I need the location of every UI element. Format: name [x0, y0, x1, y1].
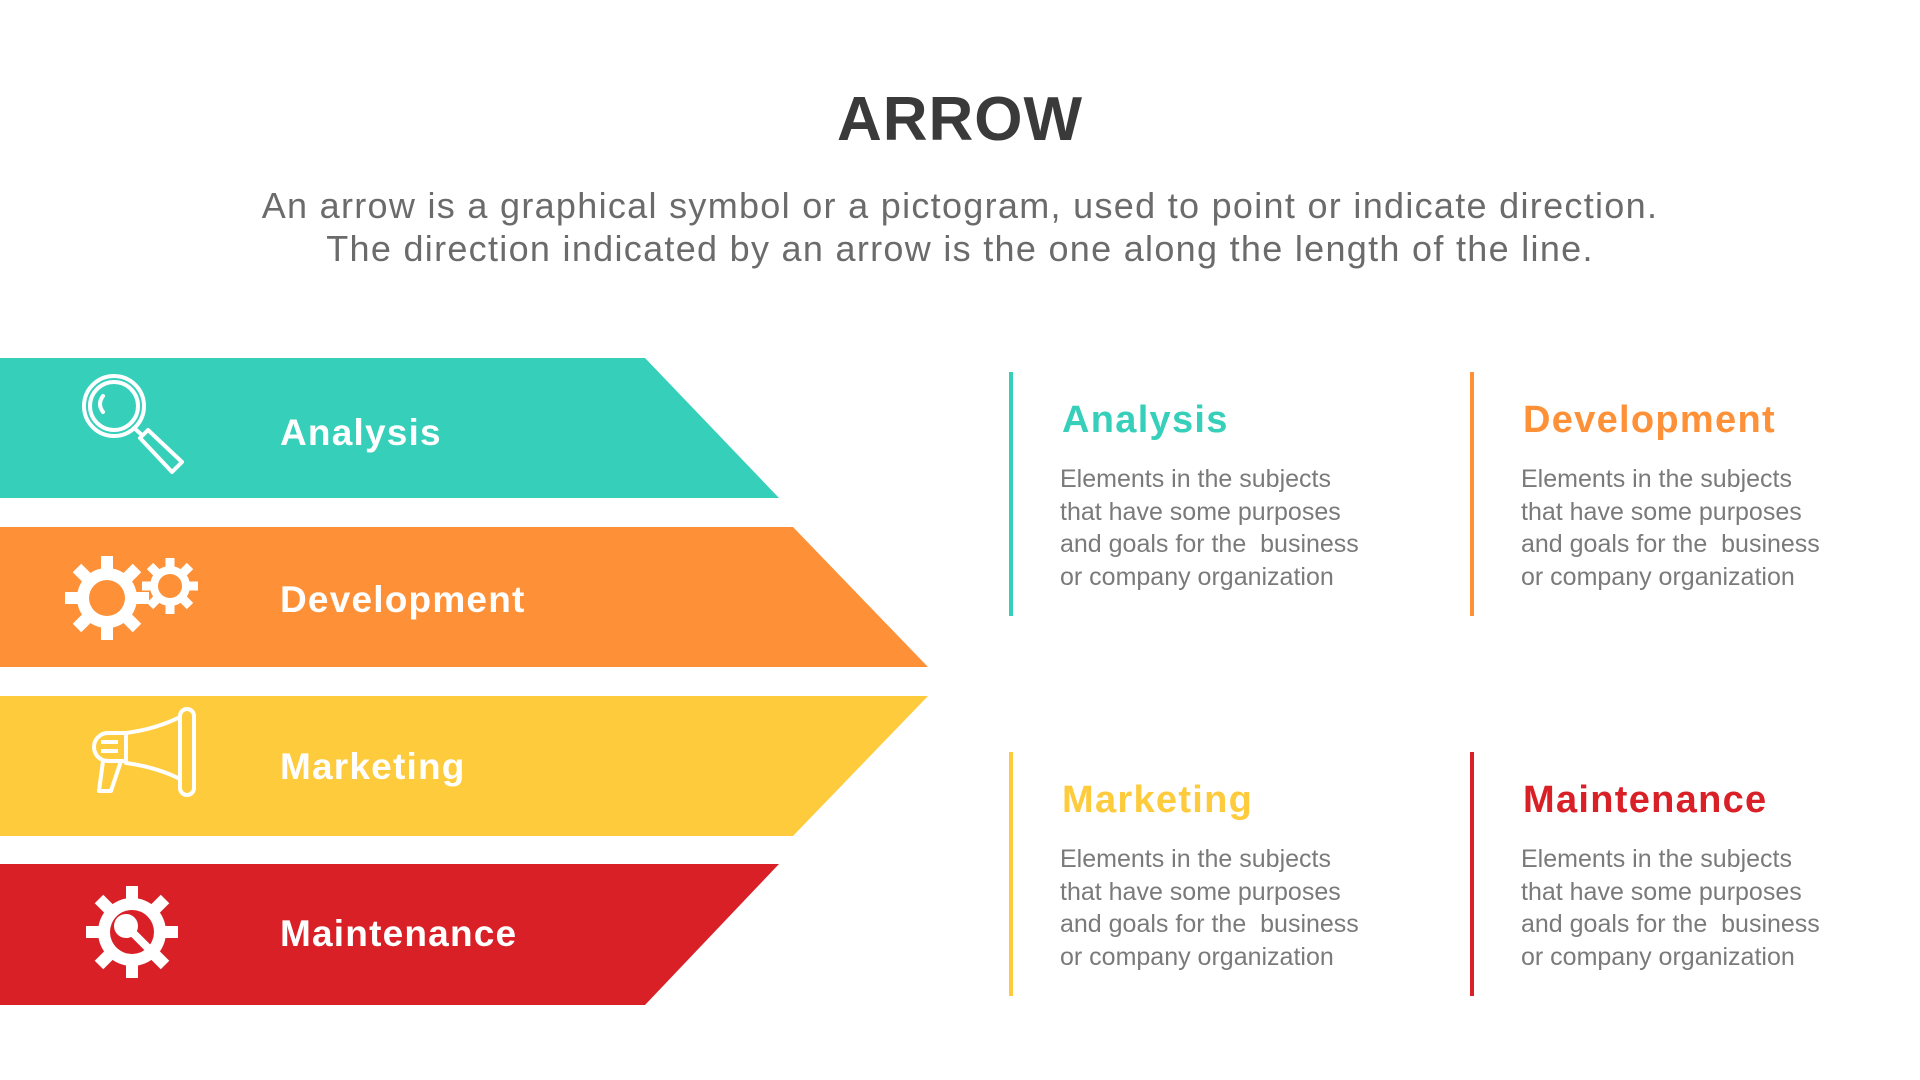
label: analysis: Analysis — [280, 412, 442, 453]
icon: megaphone — [94, 709, 194, 795]
subtitle: An arrow is a graphical symbol or a pictogram, used to point or indicate direction. — [262, 185, 1658, 226]
panel: marketing — [1009, 752, 1359, 996]
heading: development: Development — [1523, 399, 1776, 441]
text: analysis: and goals for the business — [1060, 530, 1359, 558]
band: development — [0, 527, 928, 667]
text: development: Elements in the subjects — [1521, 465, 1792, 493]
text: development: or company organization — [1521, 562, 1795, 590]
text: maintenance: Elements in the subjects — [1521, 845, 1792, 873]
label: marketing: Marketing — [280, 746, 466, 787]
icon: gear wrench — [86, 886, 178, 978]
heading: maintenance: Maintenance — [1523, 779, 1767, 821]
band: marketing — [0, 696, 928, 836]
text: development — [1521, 465, 1820, 590]
label: development: Development — [280, 579, 526, 620]
panel: development — [1470, 372, 1820, 616]
title: ARROW — [837, 85, 1083, 154]
text: analysis: Elements in the subjects — [1060, 465, 1331, 493]
arrow bands chart — [0, 358, 928, 1005]
panel: maintenance — [1470, 752, 1820, 996]
text: maintenance: or company organization — [1521, 942, 1795, 970]
text: analysis: or company organization — [1060, 562, 1334, 590]
icon: gears — [65, 556, 198, 640]
subtitle — [262, 185, 1658, 269]
text: marketing: Elements in the subjects — [1060, 845, 1331, 873]
text: development: that have some purposes — [1521, 498, 1802, 526]
text: marketing: and goals for the business — [1060, 910, 1359, 938]
text: analysis — [1060, 465, 1359, 590]
icon: magnifier — [84, 376, 182, 472]
panel: analysis — [1009, 372, 1359, 616]
label: maintenance: Maintenance — [280, 913, 517, 954]
text: maintenance: that have some purposes — [1521, 878, 1802, 906]
band: maintenance — [0, 864, 779, 1005]
heading: marketing: Marketing — [1062, 779, 1253, 821]
heading: analysis: Analysis — [1062, 399, 1229, 441]
text: marketing: that have some purposes — [1060, 878, 1341, 906]
text: marketing — [1060, 845, 1359, 970]
band: analysis — [0, 358, 779, 498]
text: maintenance — [1521, 845, 1820, 970]
text: development: and goals for the business — [1521, 530, 1820, 558]
text: maintenance: and goals for the business — [1521, 910, 1820, 938]
subtitle: The direction indicated by an arrow is the one along the length of the line. — [326, 228, 1594, 269]
text: marketing: or company organization — [1060, 942, 1334, 970]
text: analysis: that have some purposes — [1060, 498, 1341, 526]
